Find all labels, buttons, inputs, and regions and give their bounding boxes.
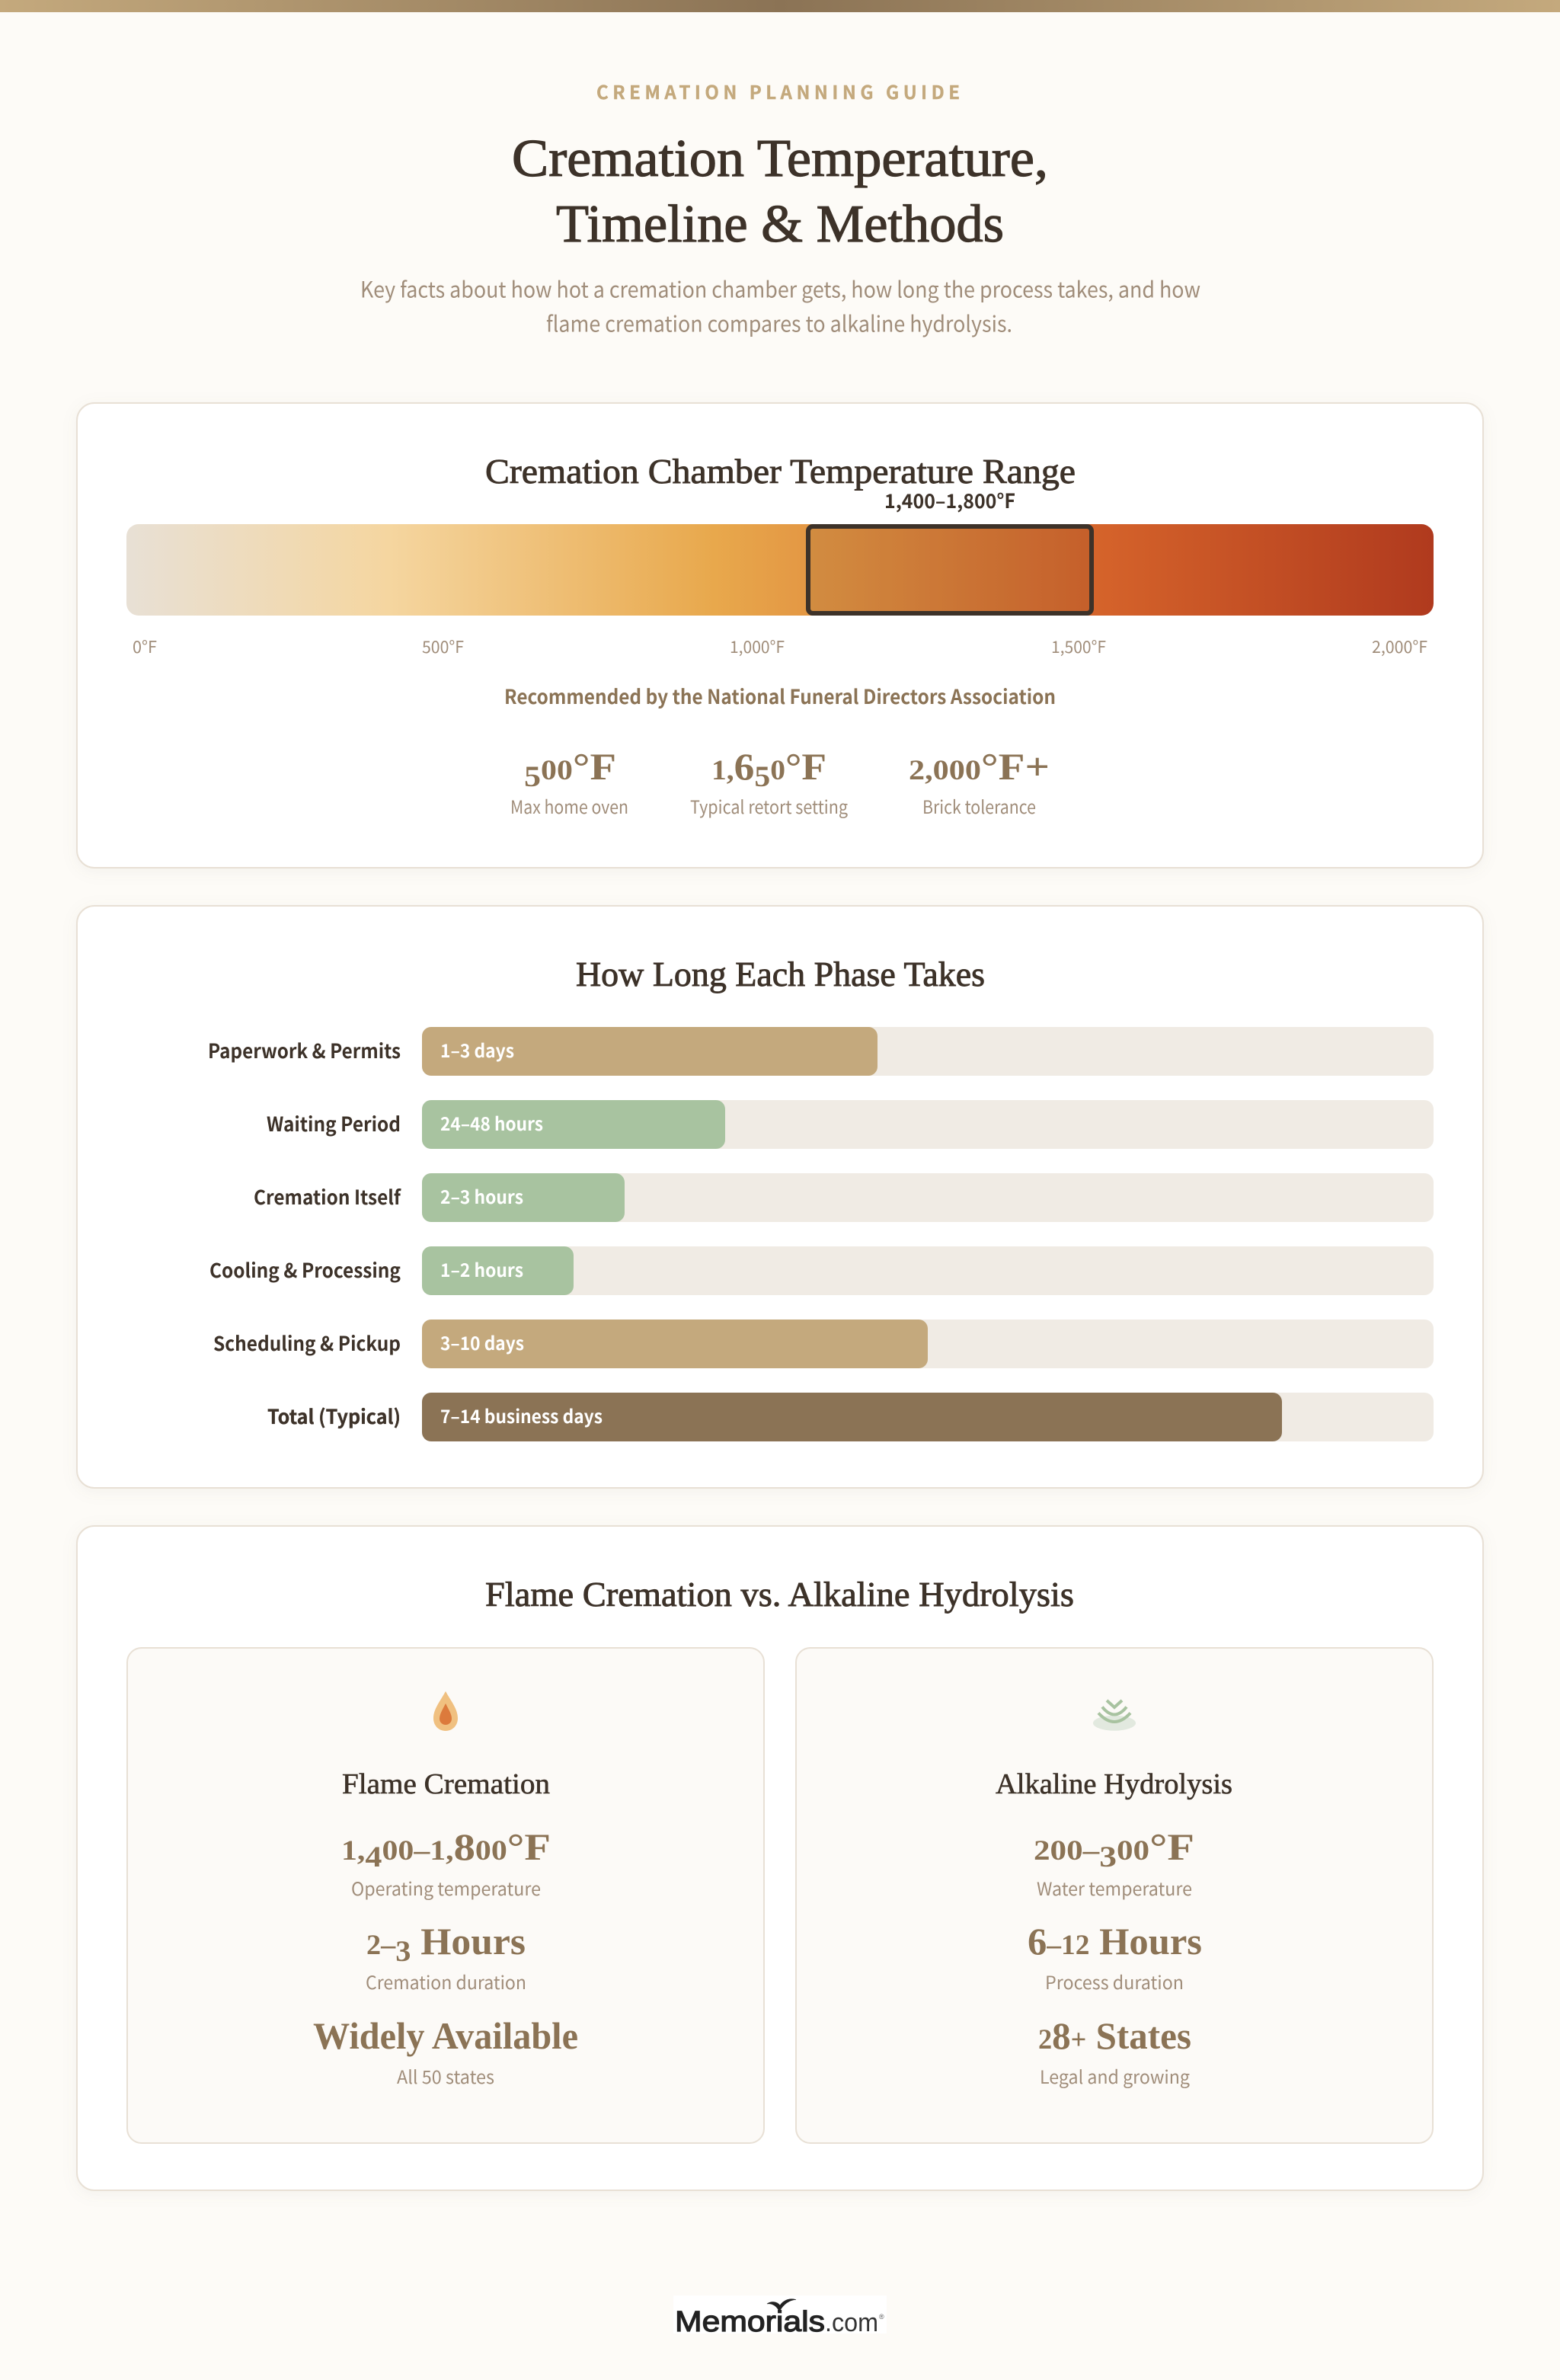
flame name: Flame Cremation [342,1768,550,1800]
stat: home oven [510,745,628,819]
scale tick labels: 2,000°F [1372,634,1427,658]
heading: temperature range: Cremation Chamber Temperature Range [485,452,1076,491]
sub-panel: flame cremation [127,1648,764,2143]
row: waiting [267,1100,1434,1149]
flame temperature: 00–1, [382,1835,454,1867]
flame duration: Cremation duration [366,1968,526,1995]
row: scheduling: Scheduling & Pickup [213,1329,401,1357]
row: scheduling: 3–10 days [440,1329,524,1355]
logo: Memorials.com [673,2295,887,2338]
hydrolysis temperature: 00 [1117,1835,1149,1867]
subtitle [360,273,1200,338]
flame availability: Widely Available [313,2014,578,2057]
row: total: 7–14 business days [440,1402,603,1428]
subtitle: flame cremation compares to alkaline hydrolysis. [546,306,1012,338]
temperature gradient bar [126,524,1434,616]
hydrolysis temperature: 3 [1099,1841,1117,1873]
stat: home oven: Max home oven [510,792,628,819]
scale tick labels [133,634,1427,658]
stat: retort setting [690,745,848,819]
flame duration [366,1920,526,1995]
main title: Timeline & Methods [556,195,1004,254]
recommendation note: Recommended by the National Funeral Directors Association [504,682,1056,710]
hydrolysis availability [1038,2014,1191,2089]
scale tick labels: 0°F [133,634,157,658]
top accent bar [0,0,1560,12]
row: total: Total (Typical) [267,1402,401,1430]
hydrolysis availability: Legal and growing [1040,2062,1190,2089]
flame availability [313,2014,578,2089]
logo: Memorials.com: Memorials [675,2306,825,2338]
flame temperature: 800°F [454,1825,545,1868]
heading: comparison: Flame Cremation vs. Alkaline Hydrolysis [485,1575,1074,1614]
scale tick labels: 1,500°F [1051,634,1106,658]
stat: retort setting: 5 [754,760,770,793]
row: paperwork [208,1027,1434,1076]
hydrolysis name: Alkaline Hydrolysis [996,1768,1232,1800]
subtitle: Key facts about how hot a cremation chamber gets, how long the process takes, and how [360,273,1200,305]
hydrolysis temperature: Water temperature [1037,1874,1192,1901]
hydrolysis duration: 6–12 Hours [1028,1920,1202,1963]
row: cremation: Cremation Itself [254,1182,401,1211]
flame temperature [341,1825,551,1901]
stat: retort setting: Typical retort setting [690,792,848,819]
row: waiting: 24–48 hours [440,1109,543,1136]
flame temperature: 4 [365,1841,382,1873]
row: cooling [209,1246,1434,1295]
panel: temperature range [77,403,1483,868]
flame duration: 3 [395,1935,411,1968]
stat: home oven: 00 [541,755,573,786]
stat: home oven: 5 [524,760,541,793]
panel: method comparison [77,1526,1483,2190]
stat: brick tolerance: 2,000°F+ [909,745,1050,788]
hydrolysis duration [1028,1920,1202,1995]
main title: Cremation Temperature, [512,130,1048,188]
flame availability: All 50 states [397,2062,494,2089]
flame duration: Hours [411,1920,526,1963]
stat: brick tolerance: Brick tolerance [922,792,1036,819]
highlight label: 1,400–1,800°F [884,486,1015,514]
heading: phases: How Long Each Phase Takes [576,955,985,993]
hydrolysis temperature [1034,1825,1194,1901]
header [360,78,1200,338]
hydrolysis temperature: 200– [1034,1835,1100,1867]
row: cremation: 2–3 hours [440,1182,523,1209]
icon: flame [433,1691,458,1731]
row: paperwork: Paperwork & Permits [208,1036,401,1064]
stat: retort setting: 0 [770,755,785,786]
main title [512,130,1048,254]
logo: Memorials.com: .com [825,2308,878,2337]
hydrolysis availability: 28+ States [1038,2014,1191,2057]
row: cooling: 1–2 hours [440,1256,523,1282]
flame temperature: 1, [341,1835,365,1867]
row: waiting: Waiting Period [267,1109,401,1137]
icon: bird [767,2299,796,2311]
stat: retort setting: 1,6 [711,745,753,788]
stat: home oven: °F [573,745,611,788]
panel: phase durations [77,906,1483,1488]
row: cremation [254,1173,1434,1222]
sub-panel: alkaline hydrolysis [796,1648,1433,2143]
icon: water [1093,1700,1136,1731]
hydrolysis duration: Process duration [1045,1968,1184,1995]
logo: Memorials.com: ® [879,2313,884,2321]
scale tick labels: 500°F [422,634,464,658]
eyebrow: CREMATION PLANNING GUIDE [596,78,960,104]
stat: retort setting: °F [785,745,824,788]
highlighted range box [808,526,1092,613]
stat: brick tolerance [909,745,1050,819]
row: scheduling [213,1320,1434,1368]
flame duration: 2– [366,1930,396,1961]
hydrolysis temperature: °F [1149,1825,1188,1868]
row: paperwork: 1–3 days [440,1036,514,1063]
row: cooling: Cooling & Processing [209,1256,401,1284]
scale tick labels: 1,000°F [730,634,785,658]
flame temperature: Operating temperature [351,1874,541,1901]
row: total [267,1393,1434,1441]
